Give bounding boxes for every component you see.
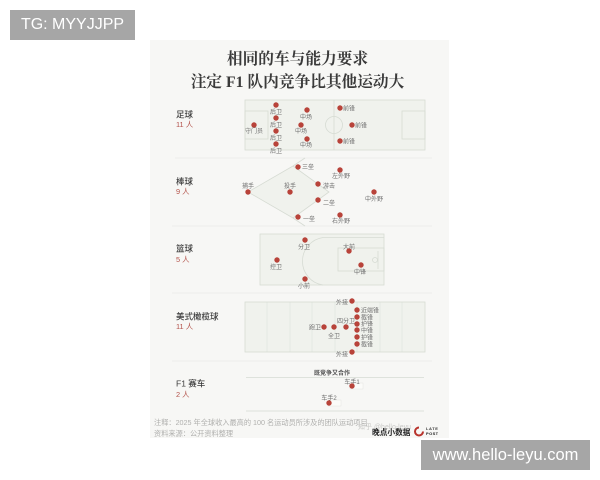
tag: top left: [10, 10, 135, 40]
footnote: [154, 418, 368, 438]
soccer players: 前锋: [343, 138, 355, 146]
baseball players: 中外野: [365, 195, 383, 203]
panel: background: [150, 40, 449, 438]
american football label: 美式橄榄球: [176, 312, 219, 322]
soccer players: 后卫: [270, 108, 282, 116]
panel: f1: [176, 369, 424, 411]
soccer players: 后卫: [270, 121, 282, 129]
basketball players: 控卫: [270, 263, 282, 271]
panel: baseball: [176, 158, 383, 226]
f1 track: 既竞争又合作: [314, 369, 350, 377]
basketball players: [270, 237, 366, 290]
soccer players: 前锋: [355, 122, 367, 130]
soccer label: 11 人: [176, 120, 194, 129]
baseball diamond: [248, 158, 329, 226]
american football players: 跑卫: [309, 324, 321, 332]
panel: basketball: [176, 234, 384, 290]
baseball players: 游击: [323, 182, 335, 190]
baseball players: 左外野: [332, 172, 350, 180]
title: 注定 F1 队内竞争比其他运动大: [191, 72, 405, 91]
soccer players: 中场: [295, 127, 307, 135]
soccer players: 前锋: [343, 104, 355, 112]
watermark: 知乎 @hello-leyu: [358, 422, 411, 431]
american football players: 截锋: [361, 340, 373, 348]
basketball players: 大前: [343, 243, 355, 251]
baseball players: 投手: [284, 182, 296, 190]
baseball players: 二垒: [323, 199, 335, 207]
footnote: 资料来源：公开资料整理: [154, 429, 233, 438]
tag: bottom right: [421, 440, 590, 470]
baseball players: 捕手: [242, 182, 254, 190]
f1 drivers: 车手1: [344, 378, 360, 386]
footnote: 注释：2025 年全球收入最高的 100 名运动员所涉及的团队运动项目: [154, 418, 368, 427]
basketball court: [260, 234, 384, 285]
american football players: 中锋: [361, 326, 373, 334]
baseball players: 三垒: [302, 163, 314, 171]
tag: bottom right: www.hello-leyu.com: [433, 446, 578, 464]
basketball players: 小前: [298, 282, 310, 290]
f1 drivers: [321, 378, 363, 406]
soccer players: 后卫: [270, 134, 282, 142]
basketball label: [176, 244, 194, 264]
logo: LATE: [426, 426, 439, 431]
f1 label: F1 赛车: [176, 378, 206, 388]
american football players: 护锋: [361, 334, 373, 342]
title: 相同的车与能力要求: [227, 49, 368, 68]
soccer label: 足球: [176, 110, 194, 120]
panel: soccer: [176, 100, 425, 155]
tag: top left: TG: MYYJJPP: [21, 16, 124, 33]
american football players: 护锋: [361, 320, 373, 328]
american football field: [245, 302, 425, 352]
basketball label: 5 人: [176, 255, 190, 264]
american football players: 近端锋: [361, 306, 379, 314]
basketball label: 篮球: [176, 244, 194, 254]
soccer players: 守门员: [245, 127, 263, 135]
american football players: 截锋: [361, 314, 373, 322]
american football players: 外接: [336, 298, 348, 306]
panel: american football: [176, 298, 425, 358]
logo: 晚点小数据: [372, 427, 411, 437]
logo: [372, 426, 439, 437]
basketball players: 中锋: [354, 268, 366, 276]
logo: POST: [426, 431, 439, 436]
basketball players: 分卫: [298, 243, 310, 251]
f1 label: [176, 378, 206, 399]
f1 label: 2 人: [176, 390, 190, 399]
american football players: 全卫: [328, 332, 340, 340]
baseball label: 9 人: [176, 187, 190, 196]
soccer field: [245, 100, 425, 150]
baseball players: [242, 163, 383, 225]
baseball players: 一垒: [303, 215, 315, 223]
baseball label: [176, 176, 194, 196]
soccer players: 中场: [300, 113, 312, 121]
f1 drivers: 车手2: [321, 394, 337, 402]
soccer label: [176, 110, 194, 129]
american football players: 外接: [336, 350, 348, 358]
title: [191, 49, 405, 91]
american football players: 四分卫: [337, 317, 355, 325]
soccer players: 中场: [300, 141, 312, 149]
baseball label: 棒球: [176, 176, 194, 186]
baseball players: 右外野: [332, 217, 350, 225]
american football players: [309, 298, 379, 358]
american football label: 11 人: [176, 322, 194, 331]
american football label: [176, 312, 219, 331]
soccer players: [245, 102, 367, 155]
soccer players: 后卫: [270, 147, 282, 155]
